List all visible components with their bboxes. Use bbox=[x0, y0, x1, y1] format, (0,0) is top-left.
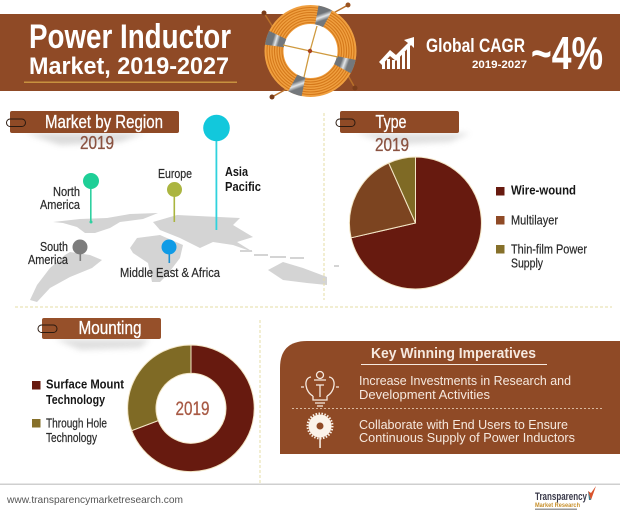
global CAGR: Global CAGR bbox=[426, 36, 525, 57]
imperative one bbox=[359, 373, 571, 402]
legend: type: Wire-wound bbox=[511, 182, 576, 198]
icon: inductor coil bbox=[262, 2, 358, 100]
donut year: 2019 bbox=[176, 399, 210, 420]
legend: mounting: Surface Mount bbox=[46, 376, 125, 392]
logo: Transparency Market Research: Transparency bbox=[535, 491, 588, 503]
title bbox=[24, 18, 237, 83]
pin: North America bbox=[83, 173, 99, 224]
panel: key winning imperatives bbox=[280, 341, 620, 454]
legend: mounting: Through Hole bbox=[46, 416, 107, 430]
section tag: market by region: Market by Region bbox=[45, 112, 163, 132]
region year: 2019 bbox=[80, 133, 114, 153]
pin: Europe bbox=[167, 182, 182, 222]
region labels: Middle East & Africa bbox=[120, 265, 221, 280]
global CAGR: 2019-2027 bbox=[472, 59, 527, 71]
section tag: mounting: Mounting bbox=[78, 318, 142, 338]
region labels: South bbox=[40, 239, 68, 254]
imperative two: Collaborate with End Users to Ensure bbox=[359, 417, 568, 432]
legend: type: Supply bbox=[511, 256, 543, 270]
icon: growth chart with arrow bbox=[379, 37, 414, 69]
pie chart: type share bbox=[349, 157, 481, 289]
panel heading: Key Winning Imperatives bbox=[371, 345, 536, 362]
section tag: market by region bbox=[6, 111, 179, 145]
panel: market by region bbox=[6, 111, 339, 302]
region labels: Pacific bbox=[225, 179, 261, 194]
icon: lightbulb bbox=[301, 372, 339, 406]
section tag: type bbox=[336, 111, 470, 145]
legend: mounting: Technology bbox=[46, 392, 106, 407]
world map bbox=[30, 213, 339, 302]
region labels: America bbox=[40, 197, 81, 212]
section tag: type: Type bbox=[376, 112, 406, 132]
logo: Transparency Market Research: Market Research bbox=[535, 502, 580, 509]
pin: Asia Pacific bbox=[203, 115, 230, 230]
legend: type: Multilayer bbox=[511, 212, 559, 228]
region labels bbox=[28, 164, 261, 280]
imperative one: Development Activities bbox=[359, 387, 491, 402]
region labels: Europe bbox=[158, 166, 192, 181]
logo: Transparency Market Research bbox=[535, 486, 596, 510]
legend: mounting: Technology bbox=[46, 430, 97, 445]
imperative one: Increase Investments in Research and bbox=[359, 373, 571, 388]
region labels: America bbox=[28, 252, 69, 267]
region labels: North bbox=[53, 184, 80, 199]
legend: mounting bbox=[32, 376, 125, 445]
imperative two: Continuous Supply of Power Inductors bbox=[359, 430, 575, 445]
title: Market, 2019-2027 bbox=[29, 53, 229, 80]
panel: type bbox=[336, 111, 588, 289]
panel: mounting bbox=[32, 318, 254, 472]
donut chart: mounting share bbox=[128, 345, 254, 472]
imperative two bbox=[359, 417, 575, 445]
title: Power Inductor bbox=[29, 18, 231, 56]
type year: 2019 bbox=[375, 135, 409, 155]
pin: South America bbox=[72, 240, 88, 261]
icon: gear flower bbox=[308, 414, 332, 448]
header banner bbox=[0, 14, 620, 91]
region labels: Asia bbox=[225, 164, 249, 179]
pin: Middle East and Africa bbox=[162, 240, 176, 263]
website url: www.transparencymarketresearch.com bbox=[6, 494, 183, 506]
section tag: mounting bbox=[38, 318, 161, 350]
global CAGR bbox=[426, 27, 603, 79]
legend: type: Thin-film Power bbox=[511, 242, 588, 256]
legend: type bbox=[496, 182, 588, 270]
